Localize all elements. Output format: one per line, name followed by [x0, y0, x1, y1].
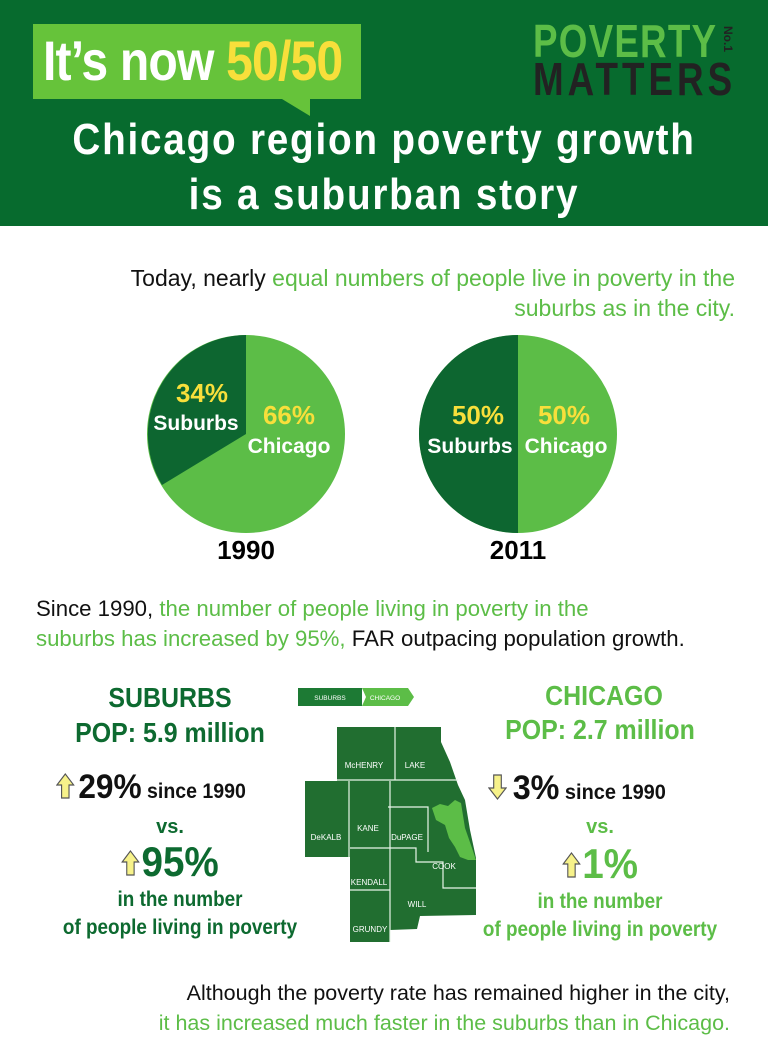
intro text: suburbs as in the city.: [514, 295, 735, 321]
legend: [298, 688, 414, 706]
text: since 1990: suburbs has increased by 95%, FAR outpacing population growth.: [36, 626, 685, 651]
stat: 3% since 1990: 3% since 1990: [513, 769, 666, 807]
pie chart 2011: Suburbs: [427, 435, 513, 458]
map: Chicago region counties: McHENRY: [345, 761, 384, 770]
map: Chicago region counties: LAKE: [405, 761, 425, 770]
panel: suburbs stats: in the number: [118, 888, 242, 911]
stat: 95%: 95%: [141, 838, 219, 885]
title: [72, 115, 696, 219]
panel: suburbs stats: SUBURBS: [108, 682, 232, 713]
pie chart 1990: Suburbs: [153, 412, 239, 435]
stat: 1%: 1%: [582, 840, 638, 887]
panel: chicago stats: of people living in poverty: [483, 918, 717, 941]
pie chart 2011: 50%: [452, 400, 504, 430]
logo: Poverty Matters: No.1: [721, 26, 735, 52]
panel: suburbs stats: of people living in poverty: [63, 916, 297, 939]
pie chart 2011: [419, 335, 617, 533]
label 1990: 1990: [217, 535, 275, 565]
legend: SUBURBS: [314, 695, 346, 702]
intro text: [131, 265, 735, 321]
label 2011: 2011: [490, 535, 546, 565]
header banner: [0, 0, 768, 226]
title: Chicago region poverty growth: [72, 115, 696, 164]
panel: suburbs stats: vs.: [156, 816, 184, 838]
legend: CHICAGO: [370, 695, 400, 702]
panel: chicago stats: POP: 2.7 million: [505, 714, 695, 745]
map: Chicago region counties: GRUNDY: [353, 925, 388, 934]
map: Chicago region counties: DeKALB: [311, 833, 341, 842]
text: since 1990: Since 1990, the number of people living in poverty in the: [36, 596, 589, 621]
map: Chicago region counties: COOK: [432, 862, 456, 871]
pie chart 1990: 34%: [176, 378, 228, 408]
pie chart 2011: 50%: [538, 400, 590, 430]
logo: Poverty Matters: POVERTY: [533, 15, 717, 67]
bottom text: Although the poverty rate has remained higher in the city,: [187, 981, 730, 1005]
panel: suburbs stats: POP: 5.9 million: [75, 717, 265, 748]
panel: suburbs stats: [56, 682, 297, 939]
map: Chicago region counties: DuPAGE: [391, 833, 423, 842]
panel: chicago stats: vs.: [586, 816, 614, 838]
panel: chicago stats: in the number: [538, 890, 662, 913]
callout: It's now 50/50: It’s now 50/50: [43, 29, 342, 92]
pie chart 1990: [147, 335, 345, 533]
logo: Poverty Matters: [533, 15, 736, 105]
stat: 29% since 1990: 29% since 1990: [78, 768, 246, 806]
panel: chicago stats: CHICAGO: [545, 680, 663, 711]
pie chart 1990: Chicago: [248, 435, 330, 458]
logo: Poverty Matters: MATTERS: [533, 53, 736, 105]
pie chart 1990: 66%: [263, 400, 315, 430]
panel: chicago stats: [483, 680, 717, 941]
title: is a suburban story: [189, 170, 579, 219]
bottom text: it has increased much faster in the suburbs than in Chicago.: [159, 1011, 730, 1035]
map: Chicago region counties: [298, 688, 476, 942]
map: Chicago region counties: KANE: [357, 824, 379, 833]
callout tail: [282, 99, 310, 116]
bottom text: [159, 981, 730, 1035]
intro text: Today, nearly equal numbers of people live in poverty in the: [131, 265, 735, 291]
map: Chicago region counties: WILL: [408, 900, 427, 909]
text: since 1990: [36, 596, 685, 651]
pie chart 2011: Chicago: [525, 435, 607, 458]
map: Chicago region counties: KENDALL: [351, 878, 388, 887]
